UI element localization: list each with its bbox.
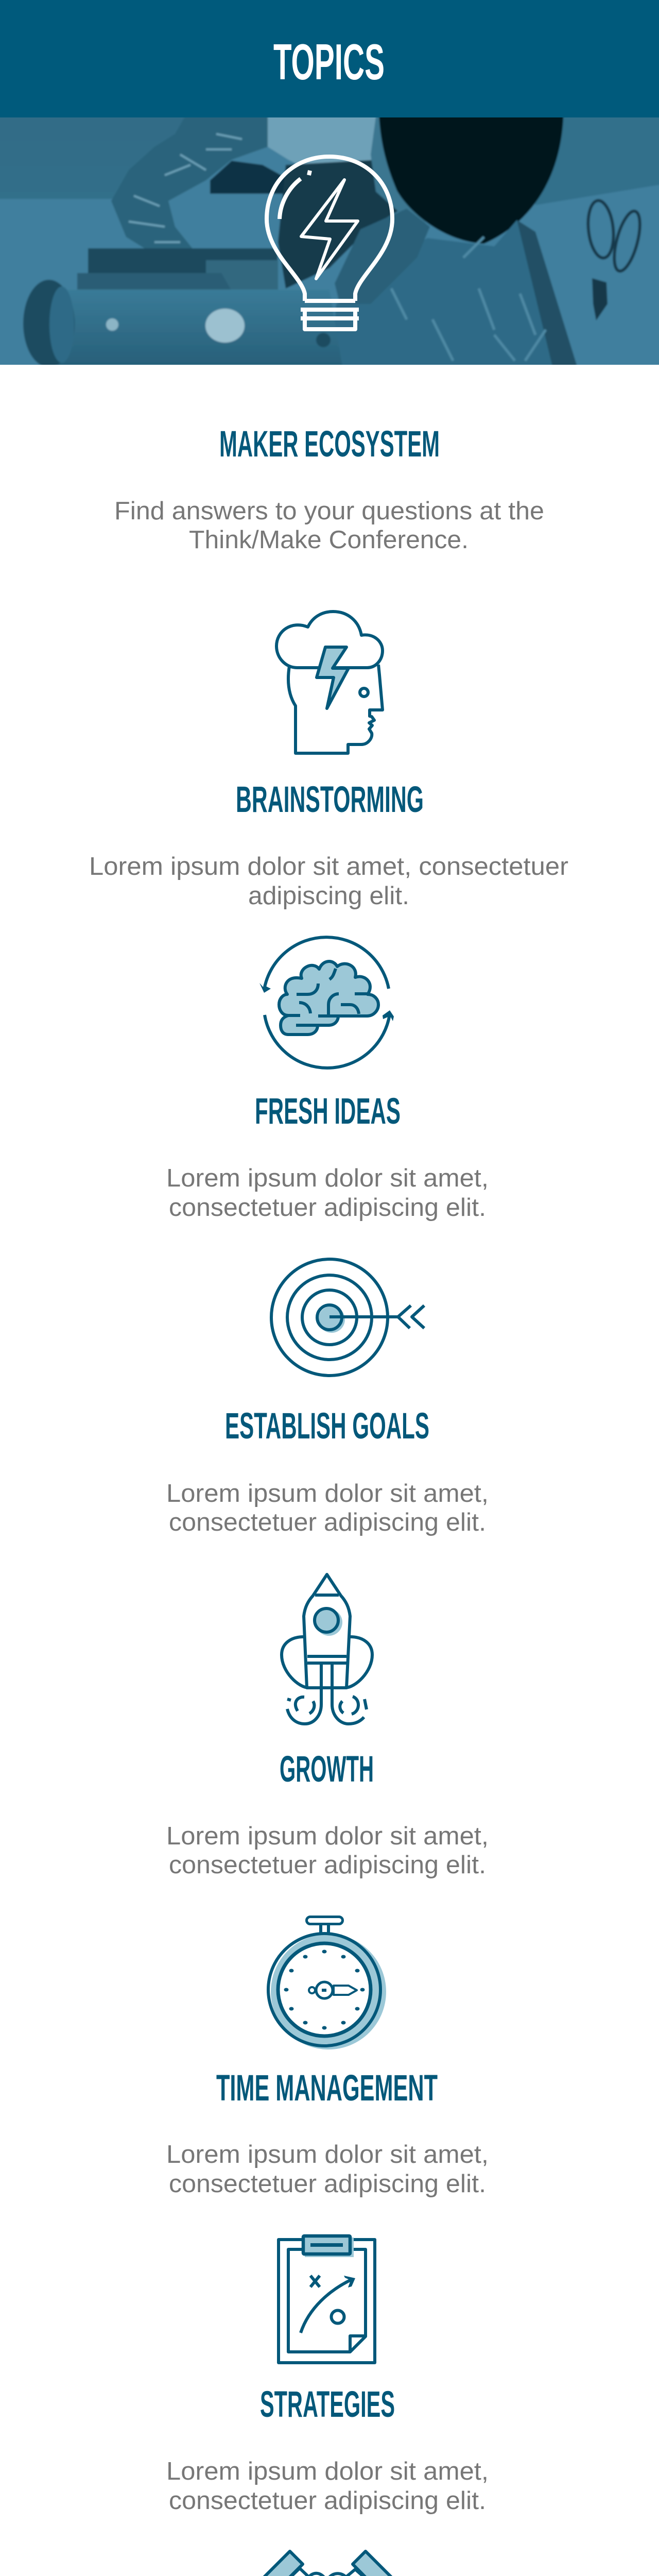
body text xyxy=(166,2458,489,2515)
body text: consectetuer adipiscing elit. xyxy=(169,1509,486,1536)
intro text: Find answers to your questions at the xyxy=(114,497,544,525)
panel: strategies xyxy=(166,2236,489,2515)
heading: FRESH IDEAS xyxy=(255,1091,401,1132)
body text xyxy=(166,1164,489,1222)
intro text: Think/Make Conference. xyxy=(189,526,469,554)
body text xyxy=(166,1480,489,1536)
body text: consectetuer adipiscing elit. xyxy=(169,1194,486,1222)
body text: consectetuer adipiscing elit. xyxy=(169,2170,486,2198)
heading: ESTABLISH GOALS xyxy=(225,1406,429,1447)
heading: TIME MANAGEMENT xyxy=(216,2068,438,2109)
hero photo: maker at a sewing machine xyxy=(0,117,659,365)
body text xyxy=(89,853,568,910)
body text: Lorem ipsum dolor sit amet, xyxy=(166,2458,489,2485)
heading: GROWTH xyxy=(280,1749,374,1790)
panel: fresh ideas xyxy=(166,937,489,1222)
panel: brainstorming xyxy=(89,612,568,910)
body text xyxy=(166,1822,489,1879)
body text: Lorem ipsum dolor sit amet, xyxy=(166,1822,489,1850)
icon: light bulb xyxy=(267,157,392,329)
header bar xyxy=(0,0,659,117)
body text xyxy=(166,2141,489,2198)
icon: head with storm cloud xyxy=(276,612,383,753)
heading: STRATEGIES xyxy=(260,2384,395,2425)
body text: adipiscing elit. xyxy=(248,882,409,910)
icon: rocket xyxy=(282,1574,372,1724)
icon: brain with cycle arrows xyxy=(259,937,394,1068)
body text: Lorem ipsum dolor sit amet, consectetuer xyxy=(89,853,568,880)
body text: Lorem ipsum dolor sit amet, xyxy=(166,2141,489,2168)
intro text xyxy=(114,497,544,554)
panel: growth xyxy=(166,1574,489,1879)
panel: establish goals xyxy=(166,1259,489,1536)
body text: Lorem ipsum dolor sit amet, xyxy=(166,1480,489,1507)
heading: BRAINSTORMING xyxy=(236,779,424,820)
icon: target with arrow xyxy=(271,1259,424,1376)
body text: Lorem ipsum dolor sit amet, xyxy=(166,1164,489,1192)
panel: networking xyxy=(89,2551,568,2576)
intro heading: MAKER ECOSYSTEM xyxy=(219,424,440,465)
body text: consectetuer adipiscing elit. xyxy=(169,2487,486,2515)
body text: consectetuer adipiscing elit. xyxy=(169,1851,486,1879)
title: TOPICS xyxy=(273,33,385,90)
icon: clipboard with play diagram xyxy=(279,2236,375,2363)
icon: stopwatch xyxy=(268,1917,386,2049)
intro panel xyxy=(114,424,544,554)
icon: handshake xyxy=(250,2551,403,2576)
panel: time management xyxy=(166,1917,489,2198)
